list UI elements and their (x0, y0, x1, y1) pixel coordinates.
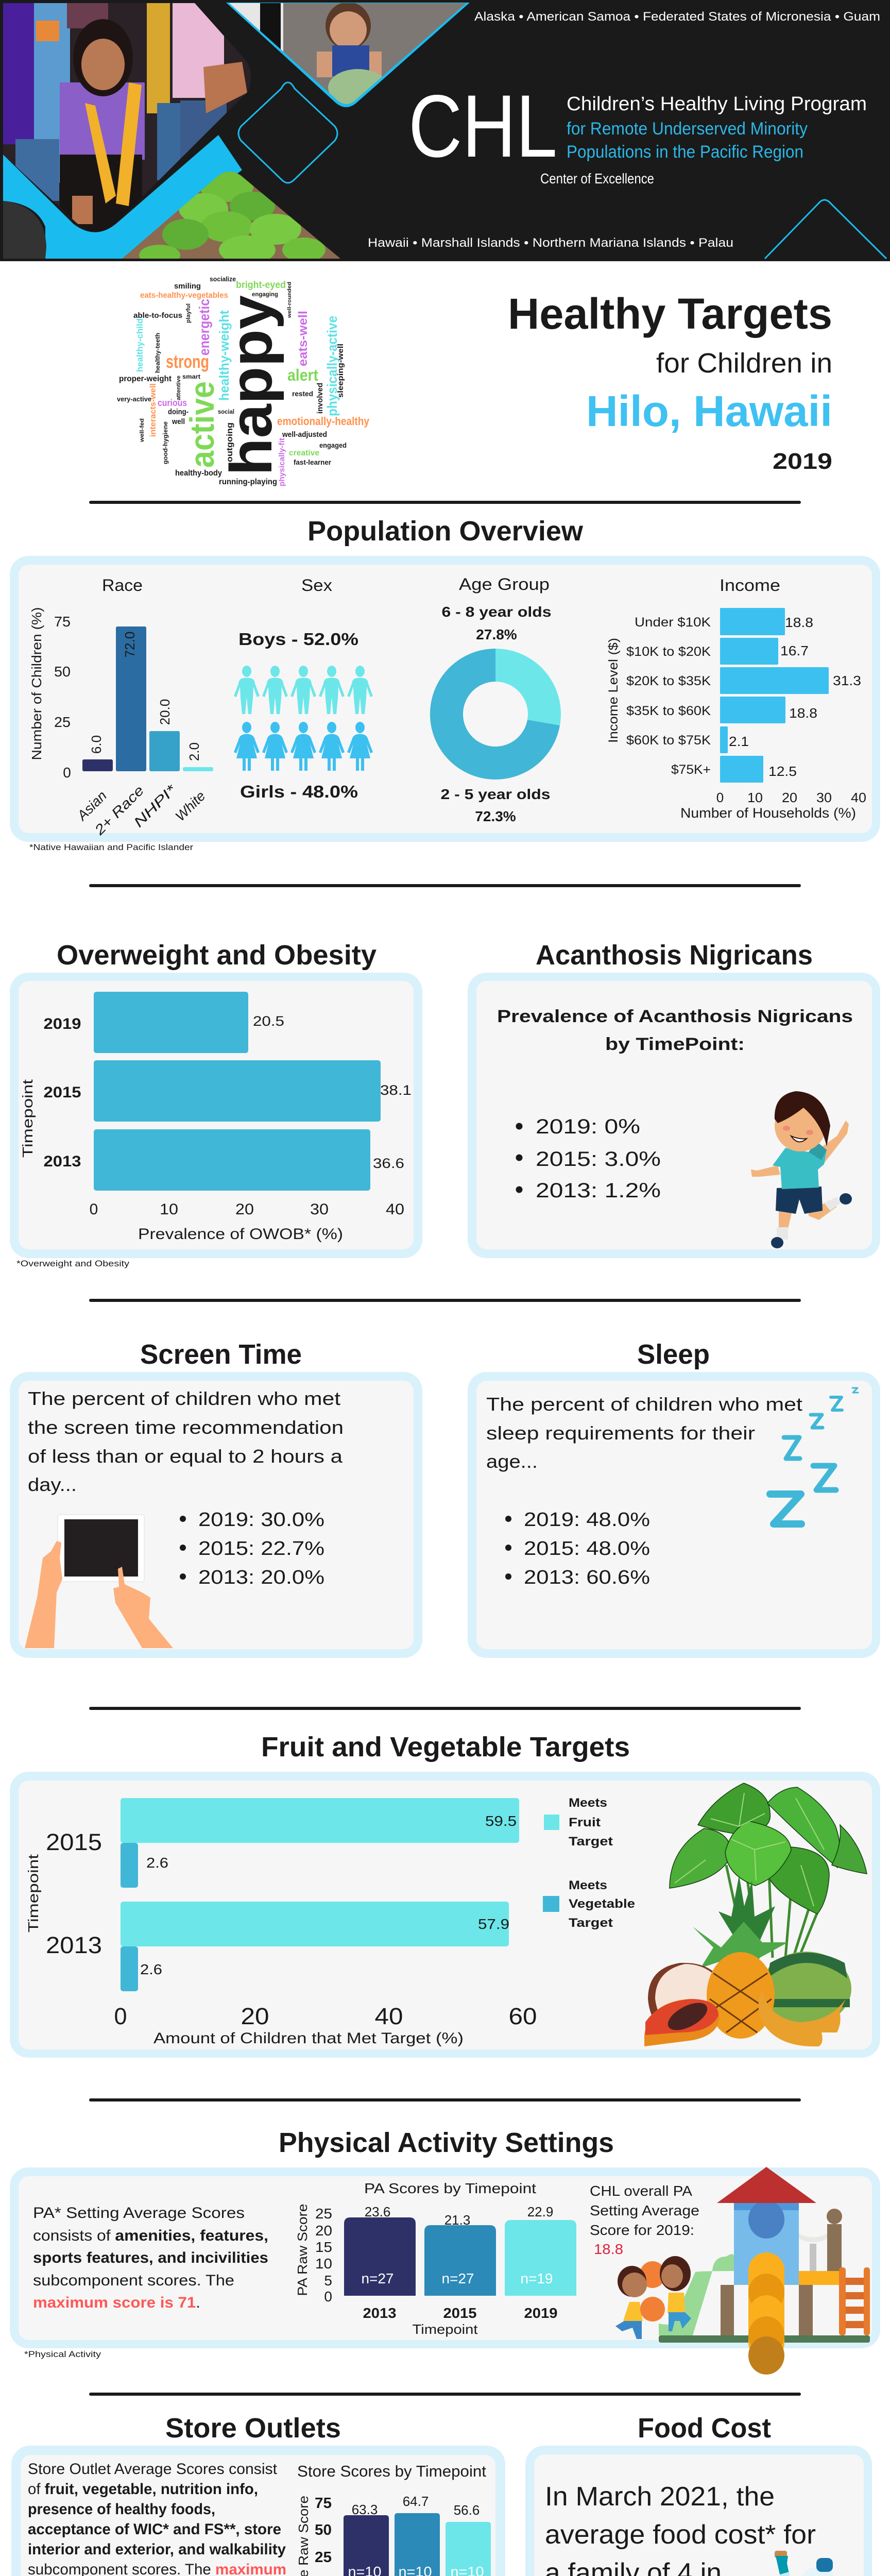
header triangle outline (765, 200, 886, 259)
text: store outlet description: acceptance of WIC* and FS**, store (28, 2521, 281, 2538)
chart: income: $20K to $35K (626, 674, 711, 688)
word cloud: alert (287, 366, 318, 384)
chart: age group donut: Age Group (459, 575, 550, 594)
chart: race: 72.0 (122, 632, 138, 657)
main title: Healthy Targets (508, 290, 832, 338)
word cloud: well (172, 417, 185, 426)
panel: overweight and obesity (10, 973, 422, 1258)
word cloud: energetic (196, 299, 212, 355)
heading: physical activity settings: Physical Activity Settings (279, 2127, 614, 2158)
bar chart: OWOB prevalence: 36.6 (373, 1156, 404, 1171)
bar chart: PA scores by timepoint: n=27 (362, 2270, 393, 2286)
bar chart: OWOB prevalence: 10 (160, 1201, 178, 1218)
list: sleep values: 2019: 48.0% (524, 1509, 650, 1531)
text: food cost statement (544, 2482, 816, 2576)
bar chart: store scores by timepoint: 25 (315, 2549, 332, 2566)
chart: race: Asian (74, 788, 110, 824)
word cloud: running-playing (219, 478, 277, 486)
bar chart: PA scores by timepoint: 21.3 (444, 2212, 470, 2228)
word cloud: attentive (176, 376, 182, 400)
main title (508, 290, 832, 474)
panel: fruit and vegetable targets (10, 1772, 880, 2058)
word cloud: doing- (168, 408, 189, 416)
bar chart: fruit and vegetable: 20 (241, 2003, 269, 2029)
panel heading: Prevalence of Acanthosis Nigricans (497, 1007, 853, 1026)
word cloud: playful (185, 303, 192, 323)
subtitle: for Children in (656, 348, 832, 379)
chart: age group donut (430, 575, 561, 824)
footnote: NHPI: *Native Hawaiian and Pacific Islander (29, 842, 193, 852)
chart: race: 0 (63, 765, 71, 781)
bar chart: fruit and vegetable: 57.9 (478, 1916, 509, 1932)
panel: food cost (525, 2446, 883, 2576)
text: screen time description: of less than or equal to 2 hours a (28, 1446, 343, 1467)
icon: running boy (751, 1091, 852, 1248)
bar chart: PA scores by timepoint: 2013 (363, 2305, 397, 2321)
chart: race: 75 (54, 614, 71, 630)
text: PA description: subcomponent scores. The (33, 2272, 234, 2289)
legend: Vegetable (569, 1897, 635, 1911)
chart: race: White (173, 788, 209, 824)
bar chart: OWOB prevalence: 20 (235, 1201, 254, 1218)
word cloud: healthy-teeth (154, 333, 161, 373)
legend (543, 1796, 635, 1930)
bar chart: PA scores by timepoint: 0 (324, 2289, 332, 2304)
word cloud: strong (166, 351, 209, 372)
word cloud: involved (316, 383, 324, 414)
icon: sleeping Zs (770, 1388, 858, 1524)
bar chart: OWOB prevalence: 38.1 (380, 1082, 412, 1098)
word cloud: very-active (117, 395, 151, 403)
bar chart: store scores by timepoint: 50 (315, 2522, 332, 2538)
text: store outlet description: presence of healthy foods, (28, 2501, 215, 2518)
chart: age group donut: 6 - 8 year olds (442, 604, 551, 620)
chart: income: 0 (716, 790, 724, 805)
text: store outlet description (28, 2461, 286, 2576)
footnote: PA: *Physical Activity (24, 2349, 101, 2359)
bar chart: PA scores by timepoint: 2015 (443, 2305, 477, 2321)
text: PA description: PA* Setting Average Scores (33, 2205, 245, 2222)
chart: race: 25 (54, 714, 71, 730)
chart: age group donut: 2 - 5 year olds (441, 786, 550, 802)
heading: sleep: Sleep (637, 1339, 710, 1370)
panel: screen time (10, 1372, 422, 1658)
chart: age group donut: 27.8% (476, 626, 517, 642)
chart: sex pictogram: Girls - 48.0% (240, 782, 358, 801)
callout: CHL overall PA score: Setting Average (590, 2202, 699, 2218)
chart: race: 50 (54, 664, 71, 680)
word cloud: bright-eyed (236, 280, 286, 291)
bar chart: fruit and vegetable: 2013 (46, 1932, 102, 1958)
word cloud: eats-well (296, 311, 310, 366)
word cloud: emotionally-healthy (277, 415, 370, 428)
heading: screen time: Screen Time (140, 1339, 302, 1370)
chart: income: $35K to $60K (626, 704, 711, 718)
heading: food cost: Food Cost (638, 2413, 771, 2444)
chart: income: $60K to $75K (626, 733, 711, 748)
bar chart: fruit and vegetable: 2.6 (140, 1961, 162, 1977)
header jurisdictions top line: Alaska • American Samoa • Federated States of Micronesia • Guam (474, 10, 880, 24)
text: screen time description: day... (28, 1474, 77, 1495)
bar chart: PA scores by timepoint: n=19 (520, 2270, 553, 2286)
bar chart: OWOB prevalence: Prevalence of OWOB* (%) (138, 1226, 343, 1243)
word cloud: well-fed (139, 418, 145, 443)
text: PA description: consists of amenities, features, (33, 2227, 268, 2244)
callout: CHL overall PA score (590, 2183, 699, 2257)
word cloud: proper-weight (119, 375, 172, 383)
text: sleep description (486, 1394, 802, 1472)
chart: race (29, 576, 213, 838)
bar chart: fruit and vegetable (25, 1798, 537, 2047)
list: prevalence values (516, 1115, 661, 1202)
text: sleep description: sleep requirements for their (486, 1422, 755, 1444)
legend: Meets (569, 1878, 607, 1892)
word cloud: healthy-body (175, 469, 222, 478)
chart: income: Number of Households (%) (680, 805, 856, 821)
legend: Fruit (569, 1816, 601, 1829)
bar chart: OWOB prevalence (20, 992, 412, 1243)
chart: income: 20 (782, 790, 797, 805)
list: screen time values: 2013: 20.0% (198, 1567, 324, 1588)
word cloud: healthy-child (135, 318, 145, 372)
word cloud: fast-learner (294, 458, 332, 466)
chart: income: $10K to $20K (626, 645, 711, 659)
year: 2019 (773, 449, 832, 474)
legend: Target (569, 1835, 613, 1849)
text: sleep description: age... (486, 1451, 538, 1472)
header cyan shape (3, 135, 242, 259)
heading: overweight and obesity: Overweight and Obesity (57, 940, 376, 971)
bar chart: OWOB prevalence: 2015 (43, 1084, 81, 1101)
header photo: toddler with greens (226, 3, 470, 107)
word cloud: smart (182, 373, 200, 380)
heading: store outlets: Store Outlets (165, 2413, 341, 2444)
panel: population overview (10, 556, 880, 842)
word cloud: healthy-weight (216, 310, 232, 401)
word cloud: curious (158, 398, 187, 408)
chart: income: $75K+ (671, 762, 711, 777)
word cloud: social (218, 408, 234, 415)
chart: income: 18.8 (785, 615, 813, 630)
bar chart: store scores by timepoint (296, 2462, 491, 2576)
heading: acanthosis nigricans: Acanthosis Nigricans (536, 940, 813, 971)
text: food cost statement: In March 2021, the (545, 2482, 775, 2512)
text: screen time description (28, 1388, 344, 1495)
text: store outlet description: Store Outlet Average Scores consist (28, 2461, 278, 2478)
panel heading line 2: by TimePoint: (605, 1035, 745, 1054)
bar chart: OWOB prevalence: 2013 (43, 1153, 81, 1170)
bar chart: OWOB prevalence: 40 (386, 1201, 404, 1218)
chart: income: 18.8 (789, 705, 817, 721)
legend: Target (569, 1916, 613, 1930)
list: sleep values: 2015: 48.0% (524, 1538, 650, 1560)
list: prevalence values: 2019: 0% (536, 1115, 640, 1138)
text: sleep description: The percent of children who met (486, 1394, 802, 1415)
text: screen time description: the screen time recommendation (28, 1417, 344, 1438)
bar chart: fruit and vegetable: 59.5 (485, 1813, 517, 1829)
chart: sex pictogram: Sex (301, 576, 332, 595)
heading: fruit and vegetable targets: Fruit and Vegetable Targets (261, 1732, 630, 1762)
word cloud: creative (289, 449, 319, 457)
bar chart: fruit and vegetable: 40 (375, 2003, 403, 2029)
text: PA description: maximum score is 71 . (33, 2294, 200, 2311)
bar chart: OWOB prevalence: 30 (310, 1201, 329, 1218)
chart: sex pictogram (234, 576, 373, 801)
chart: race: 6.0 (89, 735, 104, 754)
callout: CHL overall PA score: 18.8 (594, 2241, 623, 2257)
header banner (0, 0, 890, 265)
footnote: OWOB: *Overweight and Obesity (16, 1259, 130, 1268)
list: prevalence values: 2015: 3.0% (536, 1148, 661, 1171)
program subtitle line 2: Populations in the Pacific Region (567, 142, 803, 162)
bar chart: OWOB prevalence: 2019 (43, 1015, 81, 1032)
word cloud: happy (218, 295, 284, 476)
word cloud: physically-active (324, 316, 340, 416)
chart: income: 40 (851, 790, 866, 805)
text: PA description (33, 2205, 268, 2311)
chart: race: NHPI* (131, 781, 180, 831)
illustration: playground and children (615, 2167, 870, 2375)
bar chart: PA scores by timepoint: n=27 (442, 2270, 474, 2286)
bar chart: PA scores by timepoint: 2019 (524, 2305, 557, 2321)
chart: income: 31.3 (833, 673, 861, 688)
header jurisdictions bottom line: Hawaii • Marshall Islands • Northern Mariana Islands • Palau (368, 236, 733, 250)
callout: CHL overall PA score: CHL overall PA (590, 2183, 692, 2199)
header photo: children with leis (3, 3, 251, 224)
bar chart: PA scores by timepoint: 20 (315, 2223, 332, 2239)
program subtitle line 1: for Remote Underserved Minority (567, 119, 808, 139)
word cloud: outgoing (226, 422, 234, 462)
panel: physical activity settings (10, 2167, 880, 2348)
panel: store outlets (11, 2446, 505, 2576)
list: screen time values: 2015: 22.7% (198, 1538, 324, 1560)
word cloud: engaged (319, 441, 347, 449)
bar chart: PA scores by timepoint: 5 (324, 2273, 332, 2289)
bar chart: store scores by timepoint: 56.6 (454, 2502, 480, 2518)
word cloud: physically-fit (278, 438, 286, 486)
list: sleep values (505, 1509, 650, 1588)
CHL wordmark: CHL (408, 77, 557, 176)
bar chart: PA scores by timepoint: PA Scores by Timepoint (364, 2180, 536, 2196)
list: screen time values (180, 1509, 324, 1588)
chart: race: 2.0 (186, 742, 202, 761)
word cloud: well-adjusted (282, 430, 327, 439)
list: prevalence values: 2013: 1.2% (536, 1179, 661, 1202)
bar chart: PA scores by timepoint: 15 (315, 2239, 332, 2255)
header grey corner (3, 201, 46, 259)
chart: race: Number of Children (%) (29, 607, 44, 760)
bar chart: PA scores by timepoint: 22.9 (527, 2204, 553, 2219)
word cloud (117, 275, 370, 486)
bar chart: PA scores by timepoint: 10 (315, 2256, 332, 2272)
chart: income: 30 (816, 790, 832, 805)
word cloud: sleeping-well (336, 344, 345, 398)
icon: tablet and hands (25, 1515, 173, 1648)
bar chart: OWOB prevalence: 0 (90, 1201, 98, 1218)
word cloud: eats-healthy-vegetables (140, 291, 228, 300)
chart: sex pictogram: Boys - 52.0% (238, 630, 358, 649)
bar chart: OWOB prevalence: 20.5 (253, 1013, 284, 1029)
bar chart: fruit and vegetable: 2015 (46, 1829, 102, 1855)
chart: income: 16.7 (780, 643, 809, 658)
word cloud: well-rounded (287, 282, 293, 318)
chart: age group donut: 72.3% (475, 808, 516, 824)
panel: acanthosis nigricans (468, 973, 880, 1258)
text: store outlet description: interior and exterior, and walkability (28, 2541, 286, 2558)
chart: income: 12.5 (768, 764, 797, 779)
chart: race: 2+ Race (91, 783, 147, 838)
chart: income: Income Level ($) (606, 638, 621, 743)
bar chart: store scores by timepoint: 64.7 (403, 2494, 429, 2509)
location: Hilo, Hawaii (586, 387, 832, 435)
word cloud: smiling (174, 282, 201, 291)
bar chart: fruit and vegetable: Timepoint (25, 1854, 41, 1933)
bar chart: fruit and vegetable: 2.6 (146, 1855, 168, 1871)
bar chart: OWOB prevalence: Timepoint (20, 1079, 36, 1158)
text: food cost statement: average food cost* for (545, 2520, 816, 2550)
list: screen time values: 2019: 30.0% (198, 1509, 324, 1531)
word cloud: good-hygiene (162, 421, 169, 464)
illustration: tropical fruits and taro (644, 1783, 867, 2046)
header diamond outline (238, 82, 337, 183)
bar chart: fruit and vegetable: Amount of Children that Met Target (%) (153, 2030, 464, 2047)
list: sleep values: 2013: 60.6% (524, 1567, 650, 1588)
chart: income: Income (720, 576, 780, 595)
icon: grocery bag (741, 2551, 883, 2576)
bar chart: PA scores by timepoint: PA Raw Score (295, 2204, 310, 2296)
bar chart: fruit and vegetable: 60 (509, 2003, 537, 2029)
bar chart: PA scores by timepoint: Timepoint (412, 2321, 478, 2337)
word cloud: active (183, 381, 221, 468)
children with balls (615, 2256, 691, 2339)
legend: Meets (569, 1796, 607, 1810)
bar chart: store scores by timepoint: 75 (315, 2495, 332, 2512)
chart: race: 20.0 (157, 699, 173, 725)
word cloud: interacts-well (149, 383, 158, 437)
word cloud: socialize (210, 275, 236, 283)
chart: income: Under $10K (635, 615, 711, 630)
bar chart: fruit and vegetable: 0 (114, 2003, 127, 2029)
panel: sleep (468, 1372, 880, 1658)
center of excellence: Center of Excellence (540, 171, 654, 187)
chart: race: Race (102, 576, 143, 595)
callout: CHL overall PA score: Score for 2019: (590, 2222, 694, 2238)
bar chart: PA scores by timepoint: 25 (315, 2206, 332, 2222)
word cloud: engaging (252, 291, 278, 298)
chart: income: 10 (747, 790, 763, 805)
word cloud: able-to-focus (133, 311, 182, 320)
text: PA description: sports features, and incivilities (33, 2249, 268, 2266)
chart: income (606, 576, 866, 821)
text: screen time description: The percent of children who met (28, 1388, 340, 1409)
heading: population overview: Population Overview (307, 516, 584, 547)
word cloud: rested (292, 389, 313, 398)
bar chart: PA scores by timepoint: 23.6 (365, 2204, 390, 2219)
bar chart: PA scores by timepoint (295, 2180, 576, 2337)
chart: income: 2.1 (729, 734, 749, 749)
program name: Children’s Healthy Living Program (567, 93, 867, 115)
bar chart: store scores by timepoint: 63.3 (352, 2502, 378, 2517)
text: store outlet description: of fruit, vegetable, nutrition info, (28, 2481, 258, 2498)
bar chart: store scores by timepoint: Store Scores by Timepoint (297, 2462, 486, 2480)
header photo: lettuce field (122, 172, 340, 259)
